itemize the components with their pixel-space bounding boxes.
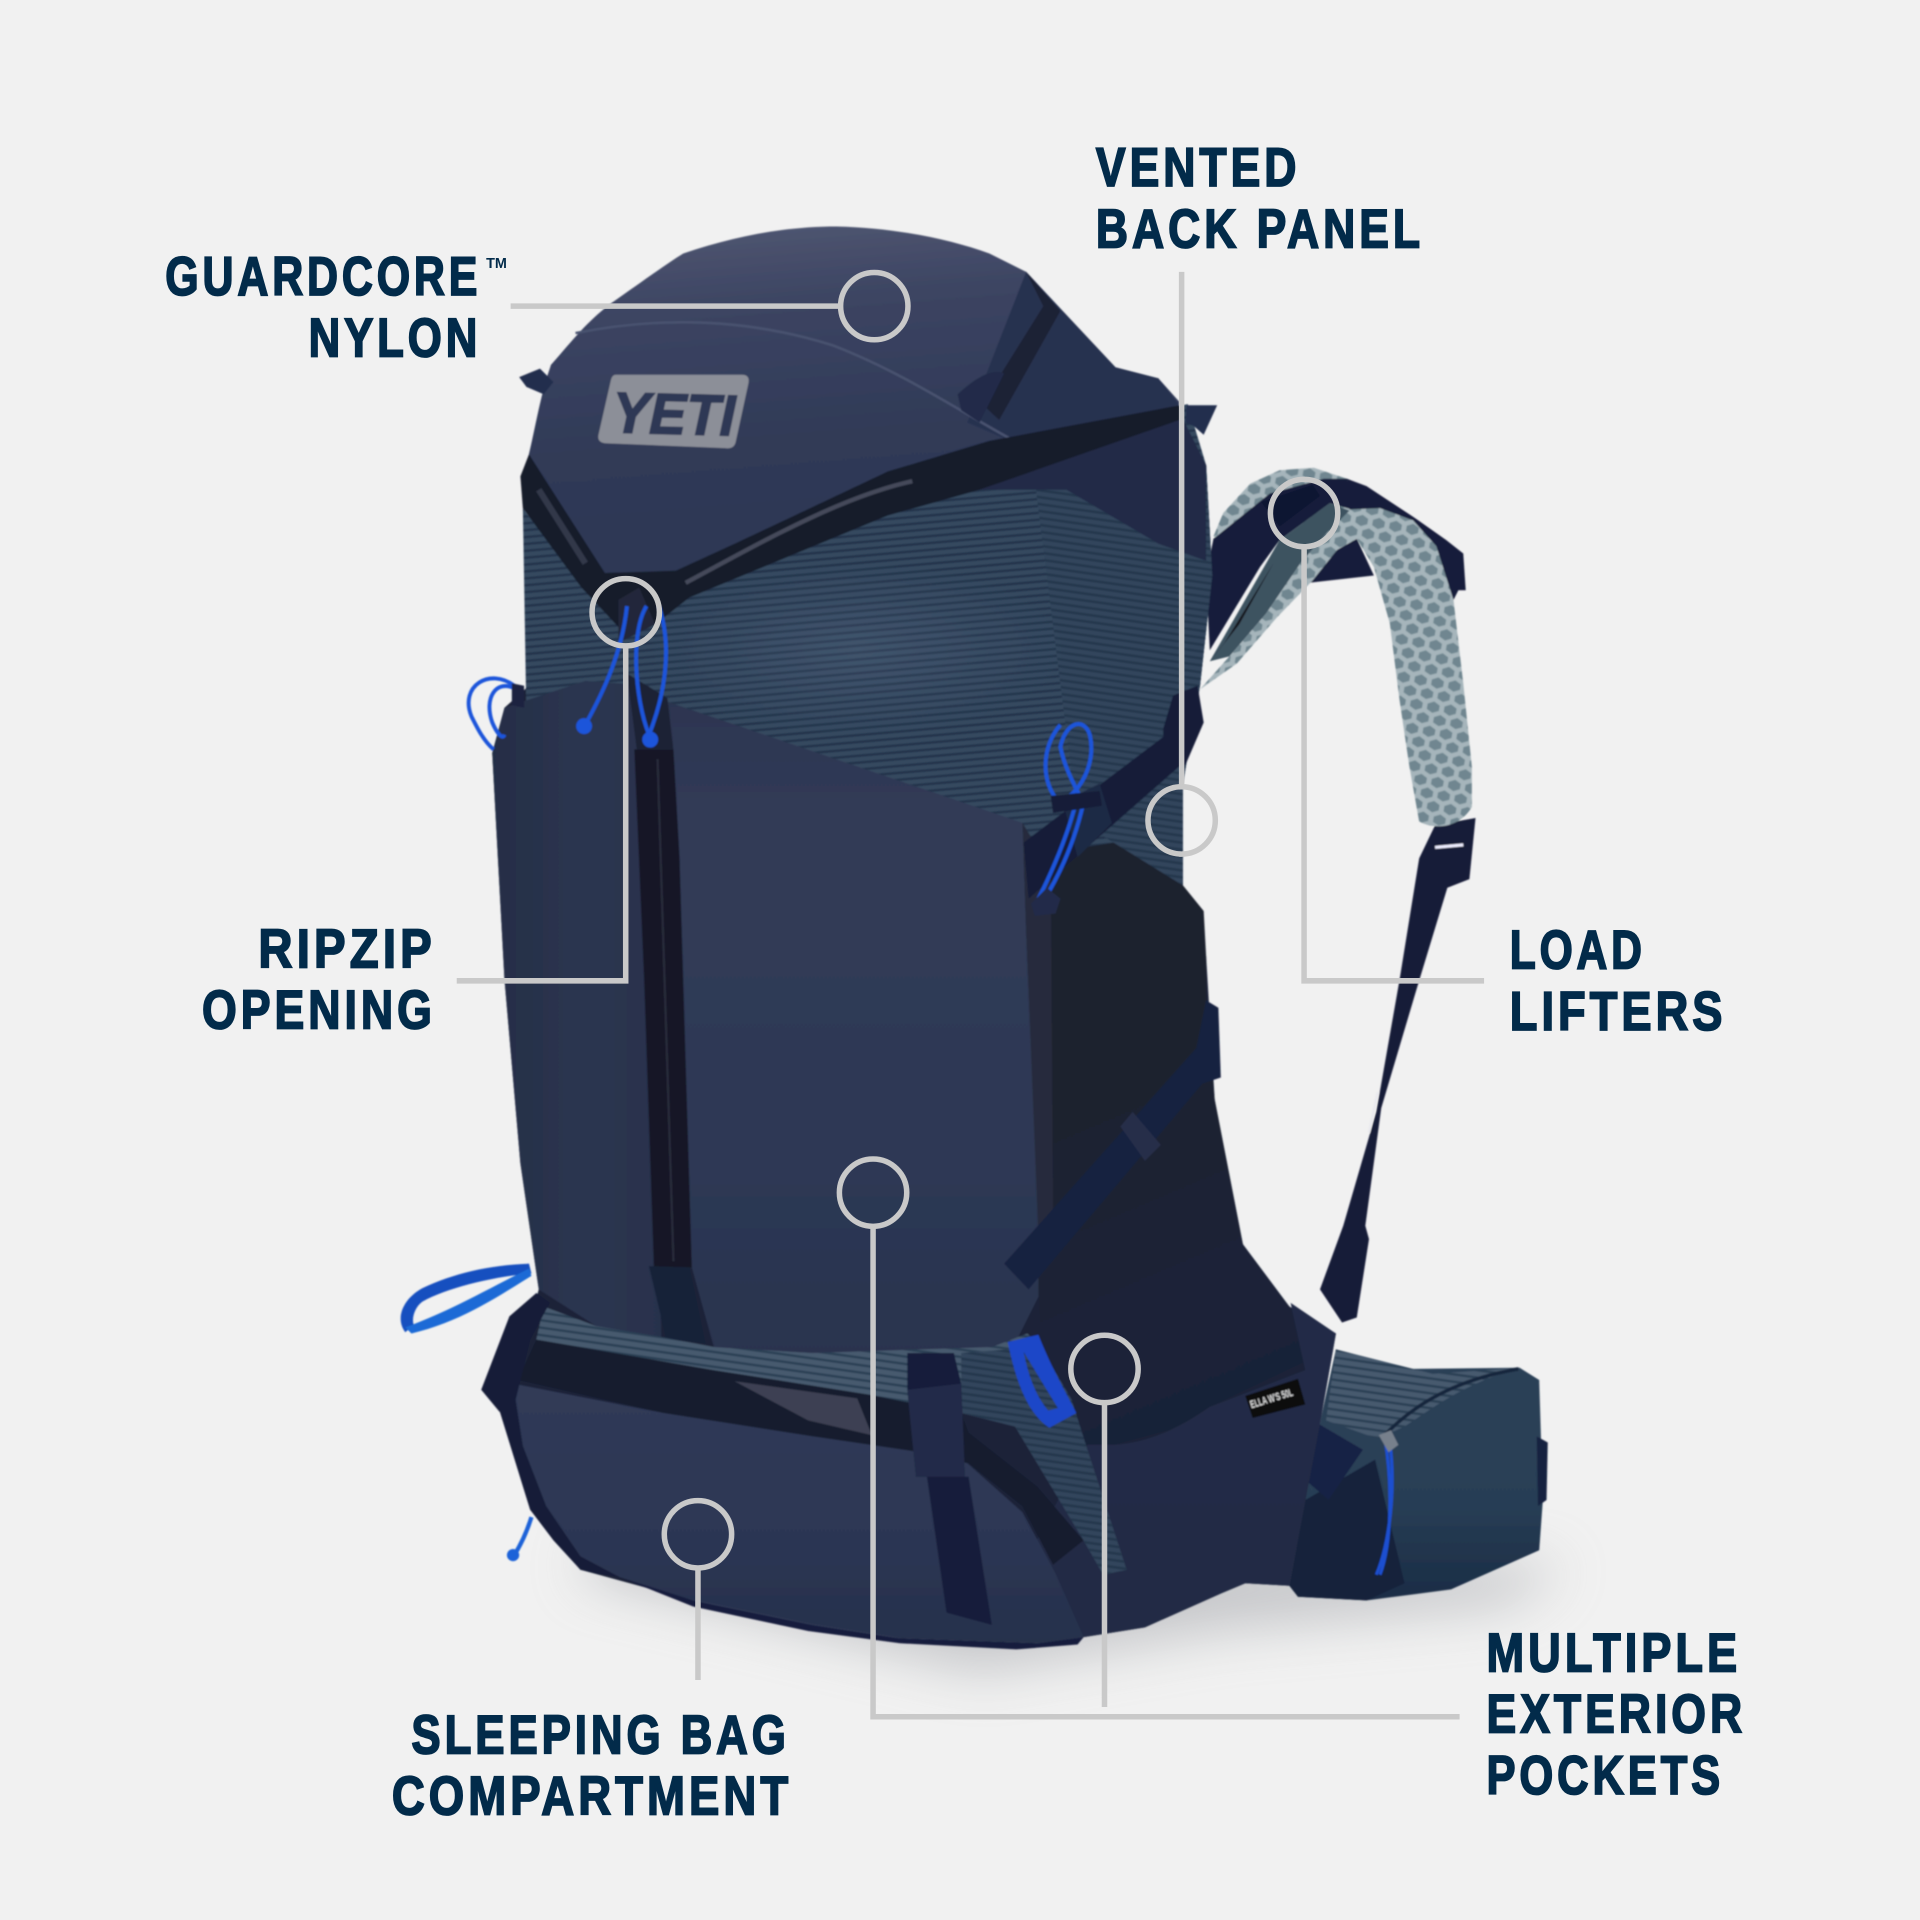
callout: vented back panel leader xyxy=(1148,272,1215,854)
top strap tabs xyxy=(519,369,1217,435)
front pocket panels xyxy=(492,673,1053,1356)
callout: ripzip opening leader xyxy=(457,579,659,981)
label: sleeping bag compartment: SLEEPING BAG xyxy=(411,1703,790,1765)
size label tag: ELLA W'S 50L xyxy=(1249,1387,1295,1411)
main back mesh xyxy=(523,404,1212,885)
lower mesh band xyxy=(536,1307,1127,1575)
label: vented back panel: VENTED xyxy=(1096,136,1300,198)
body base silhouette xyxy=(492,227,1336,1643)
callout: load lifters leader xyxy=(1270,479,1484,981)
size label tag xyxy=(1245,1379,1305,1418)
side stretch pocket xyxy=(1022,833,1310,1445)
upper compression strap and buckle xyxy=(1024,686,1204,899)
callout: multiple exterior pockets leader xyxy=(839,1159,1460,1717)
navy under shoulder arch xyxy=(1308,539,1374,583)
blue zip pull cords xyxy=(576,606,666,748)
small blue pull, lower left xyxy=(507,1517,531,1561)
label: load lifters: LIFTERS xyxy=(1510,980,1727,1042)
top lid xyxy=(529,227,1179,573)
side buckle and webbing, bottom left xyxy=(481,1293,550,1412)
label: ripzip opening: RIPZIP xyxy=(258,917,436,979)
label: load lifters: LOAD xyxy=(1510,919,1646,981)
lower compression strap and buckle xyxy=(1004,1000,1221,1289)
blue cord loops, right xyxy=(1031,724,1102,916)
blue cord loops, left xyxy=(469,678,524,749)
callout: sleeping bag compartment leader xyxy=(664,1501,732,1680)
hip belt pocket xyxy=(1289,1349,1548,1600)
centre strap and buckle xyxy=(907,1353,992,1625)
label: multiple exterior pockets: POCKETS xyxy=(1487,1744,1724,1806)
label: load lifters xyxy=(1510,919,1727,1042)
label: guardcore nylon: TM xyxy=(486,256,507,272)
backpack illustration xyxy=(401,227,1548,1649)
callout: guardcore nylon leader xyxy=(511,272,908,340)
label: multiple exterior pockets xyxy=(1487,1621,1746,1806)
roll-top zipper xyxy=(520,405,1183,643)
label: sleeping bag compartment: COMPARTMENT xyxy=(392,1765,792,1827)
lower side panel xyxy=(992,1303,1336,1643)
front vertical zipper xyxy=(634,749,705,1343)
label: multiple exterior pockets: EXTERIOR xyxy=(1487,1683,1746,1745)
bottom zipper xyxy=(518,1340,1084,1565)
label: ripzip opening xyxy=(202,917,436,1041)
label: sleeping bag compartment xyxy=(392,1703,792,1827)
blue webbing loop xyxy=(1008,1335,1076,1428)
label: ripzip opening: OPENING xyxy=(202,979,436,1041)
shoulder pad mesh xyxy=(1200,468,1472,826)
label: guardcore nylon: GUARDCORE xyxy=(165,245,481,307)
label: vented back panel xyxy=(1096,136,1424,259)
label: guardcore nylon xyxy=(165,245,507,368)
label: multiple exterior pockets: MULTIPLE xyxy=(1487,1621,1741,1683)
shoulder pad navy top edge xyxy=(1347,479,1466,600)
label: vented back panel: BACK PANEL xyxy=(1096,197,1424,259)
YETI logo: YETI xyxy=(612,381,737,449)
label: guardcore nylon: NYLON xyxy=(309,306,481,368)
shoulder strap webbing xyxy=(1320,818,1476,1322)
ground shadow xyxy=(576,1531,1567,1671)
blue webbing handle xyxy=(401,1264,531,1333)
bottom sleeping bag compartment xyxy=(500,1384,1084,1649)
